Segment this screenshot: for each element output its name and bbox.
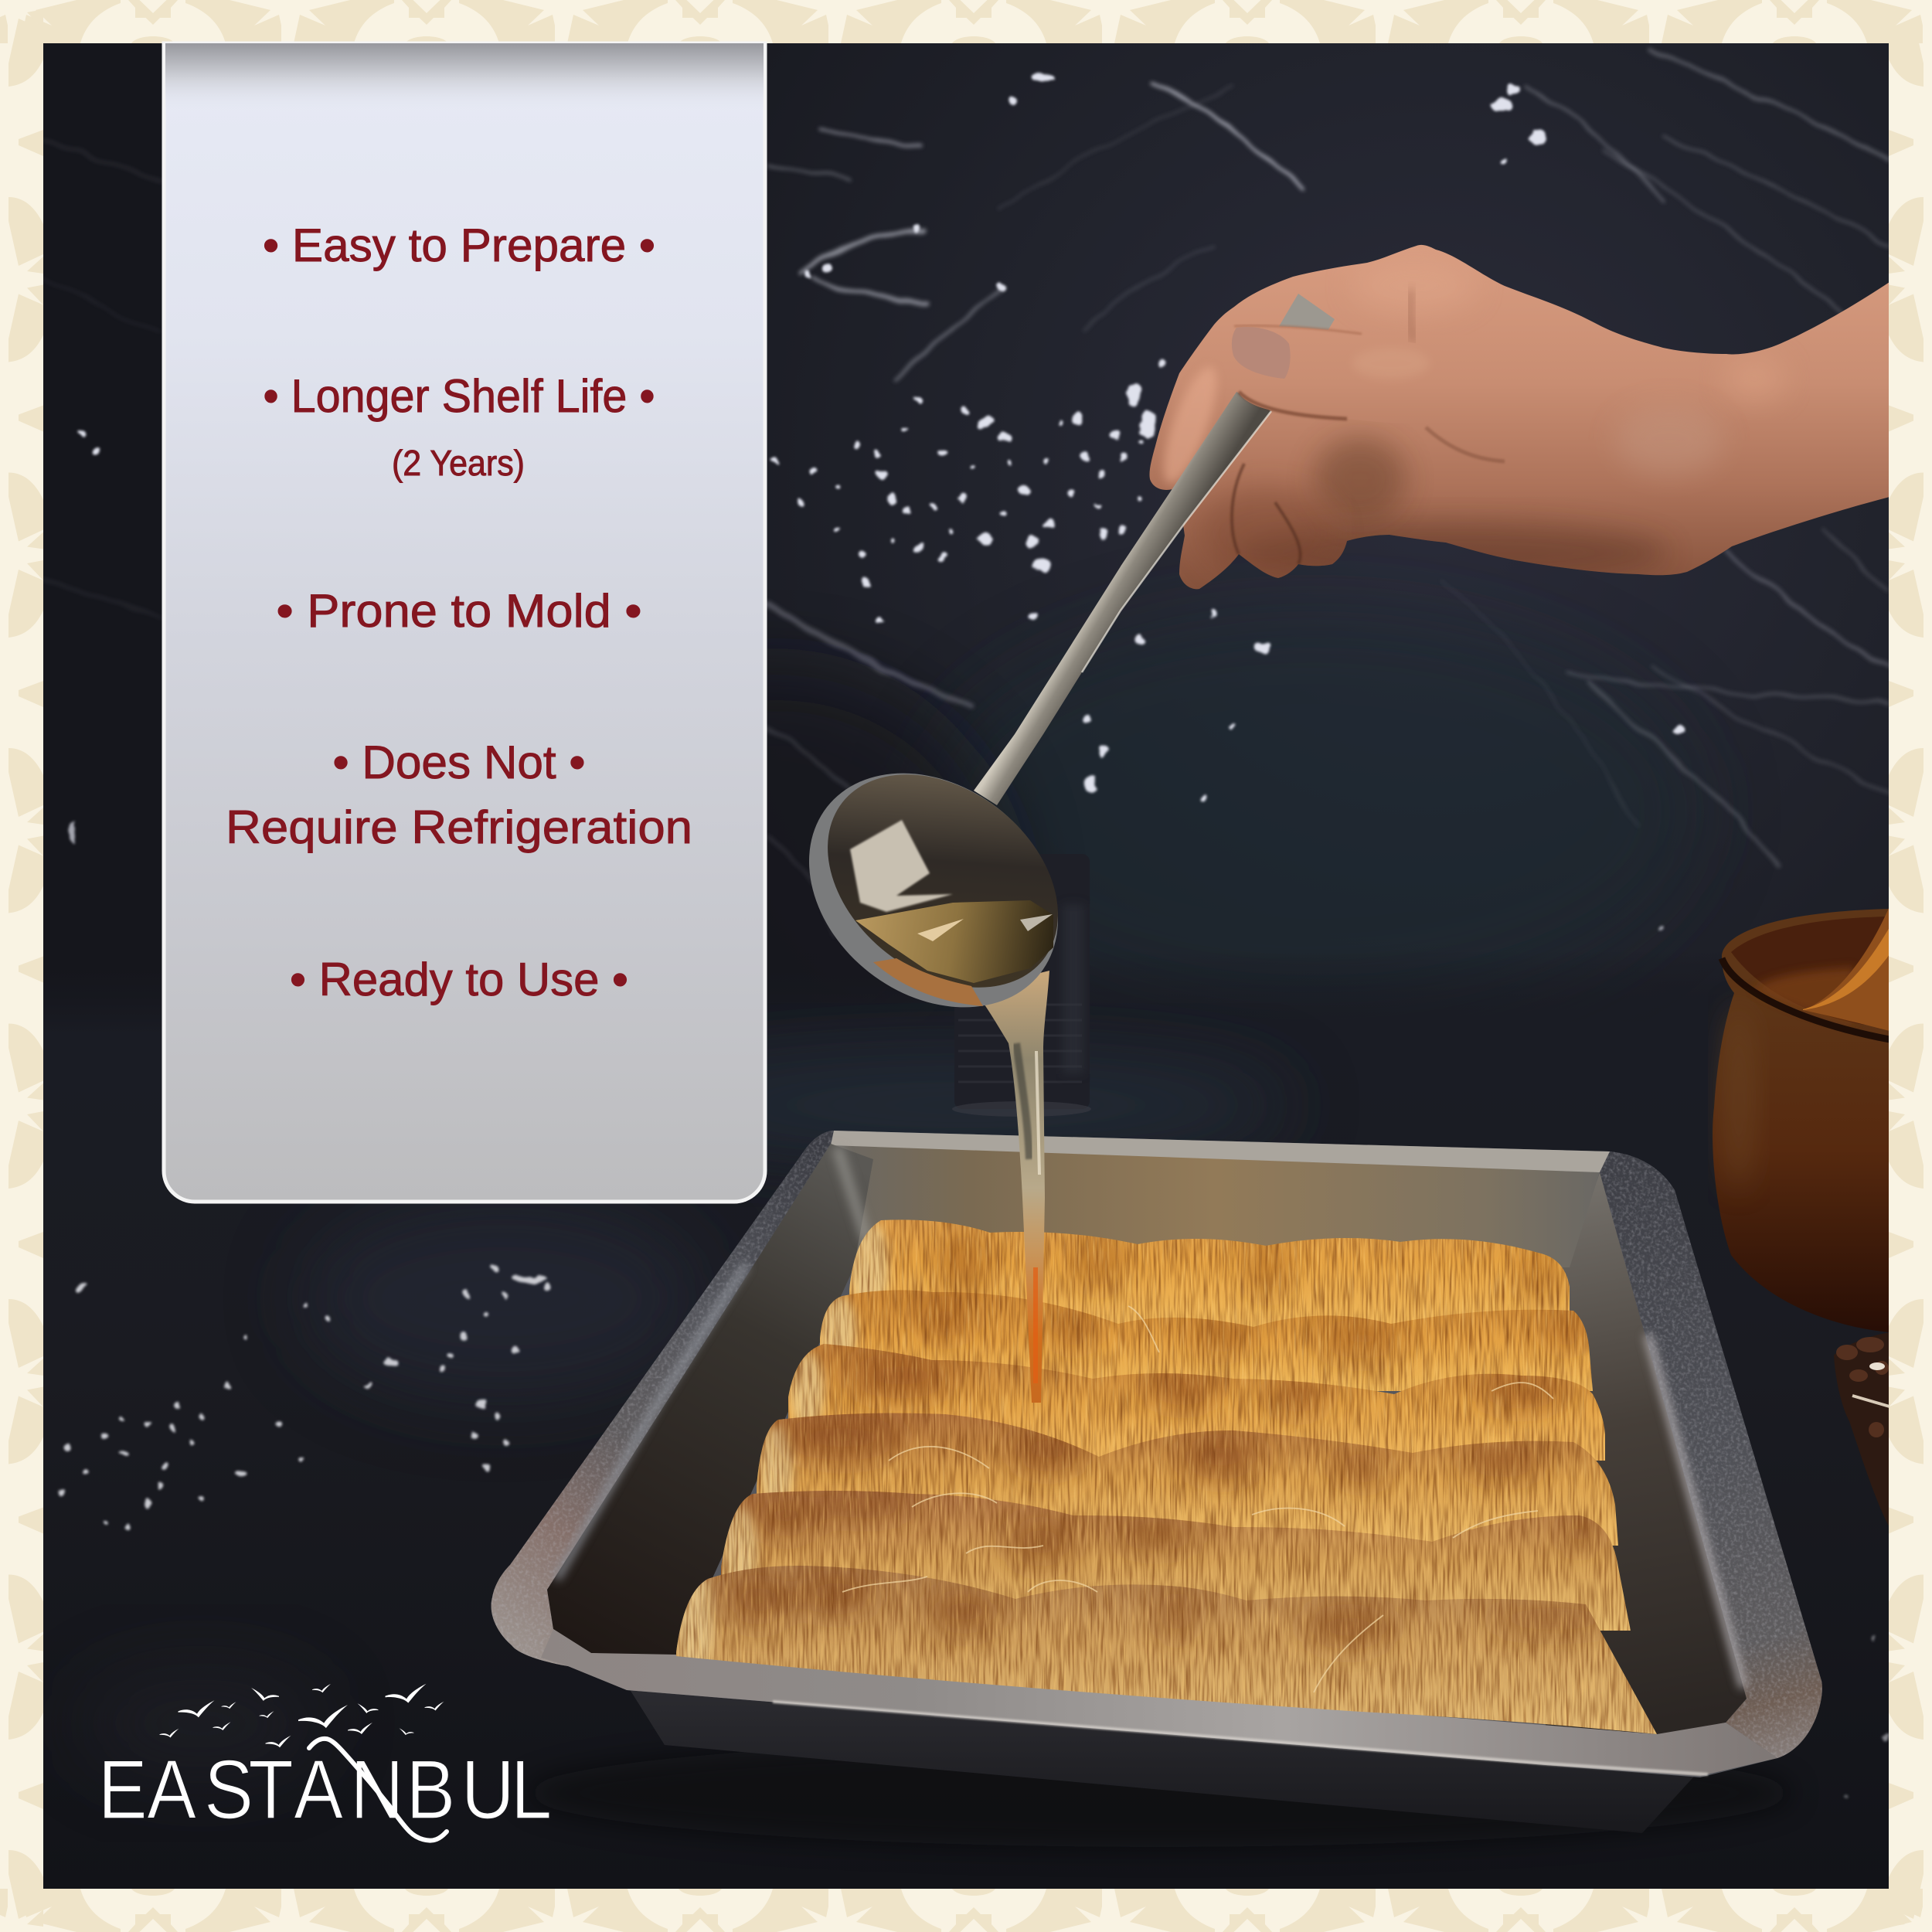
- benefit: longer shelf life: • Longer Shelf Life •: [263, 370, 655, 422]
- splatter of sparkles on the wall: [70, 74, 1688, 933]
- pastry roll 4: [753, 1410, 1623, 1549]
- loose pastry strands: [842, 1306, 1553, 1692]
- ladle handle over lower fingers: [1082, 392, 1271, 672]
- kunafa pastry rolls: [672, 1213, 1662, 1739]
- benefit: require refrigeration: Require Refrigeration: [226, 801, 692, 853]
- baking tray: [492, 1131, 1822, 1847]
- thumb nail: [1232, 327, 1291, 379]
- front rim highlight: [541, 1629, 1777, 1776]
- Eastanbul logo: [98, 1684, 552, 1841]
- syrup stream: [974, 971, 1049, 1403]
- benefit note: 2 years: (2 Years): [392, 443, 525, 483]
- ladle bowl: [763, 725, 1104, 1056]
- marble veins: [43, 49, 1889, 937]
- wordmark: EASTANBUL: [98, 1742, 552, 1836]
- chocolate bowl at right edge: [1834, 1332, 1889, 1527]
- tin can behind ladle: [952, 854, 1091, 1117]
- splatter of sugar on the table: [59, 1263, 1888, 1801]
- copper pot on the right: [1713, 906, 1889, 1332]
- hand pouring: [1149, 245, 1889, 589]
- benefit: easy to prepare: • Easy to Prepare •: [263, 219, 655, 271]
- panel: product benefits: [164, 43, 765, 1202]
- ladle: [763, 392, 1271, 1056]
- pastry roll 5: [719, 1488, 1634, 1634]
- pastry roll 1: [842, 1213, 1577, 1333]
- pastry roll 3: [784, 1341, 1611, 1464]
- tray ridge highlights: [558, 1151, 1743, 1685]
- benefit: prone to mold: • Prone to Mold •: [277, 585, 641, 637]
- left wall: [547, 1144, 873, 1658]
- top rim highlight: [831, 1131, 1610, 1172]
- right wall: [1546, 1172, 1747, 1736]
- right flange: [1600, 1151, 1822, 1758]
- benefit: does not: • Does Not •: [332, 736, 586, 788]
- ladle handle: [974, 392, 1271, 805]
- icon: flock of birds: [159, 1684, 444, 1747]
- top wall: [831, 1142, 1600, 1283]
- left flange: [492, 1131, 834, 1669]
- pastry roll 6: [672, 1561, 1662, 1739]
- thumb: [1223, 326, 1452, 423]
- wordmark swash: [309, 1739, 447, 1841]
- benefit: ready to use: • Ready to Use •: [290, 954, 628, 1005]
- pastry roll 2: [815, 1287, 1596, 1395]
- handle tip above thumb: [1278, 294, 1335, 331]
